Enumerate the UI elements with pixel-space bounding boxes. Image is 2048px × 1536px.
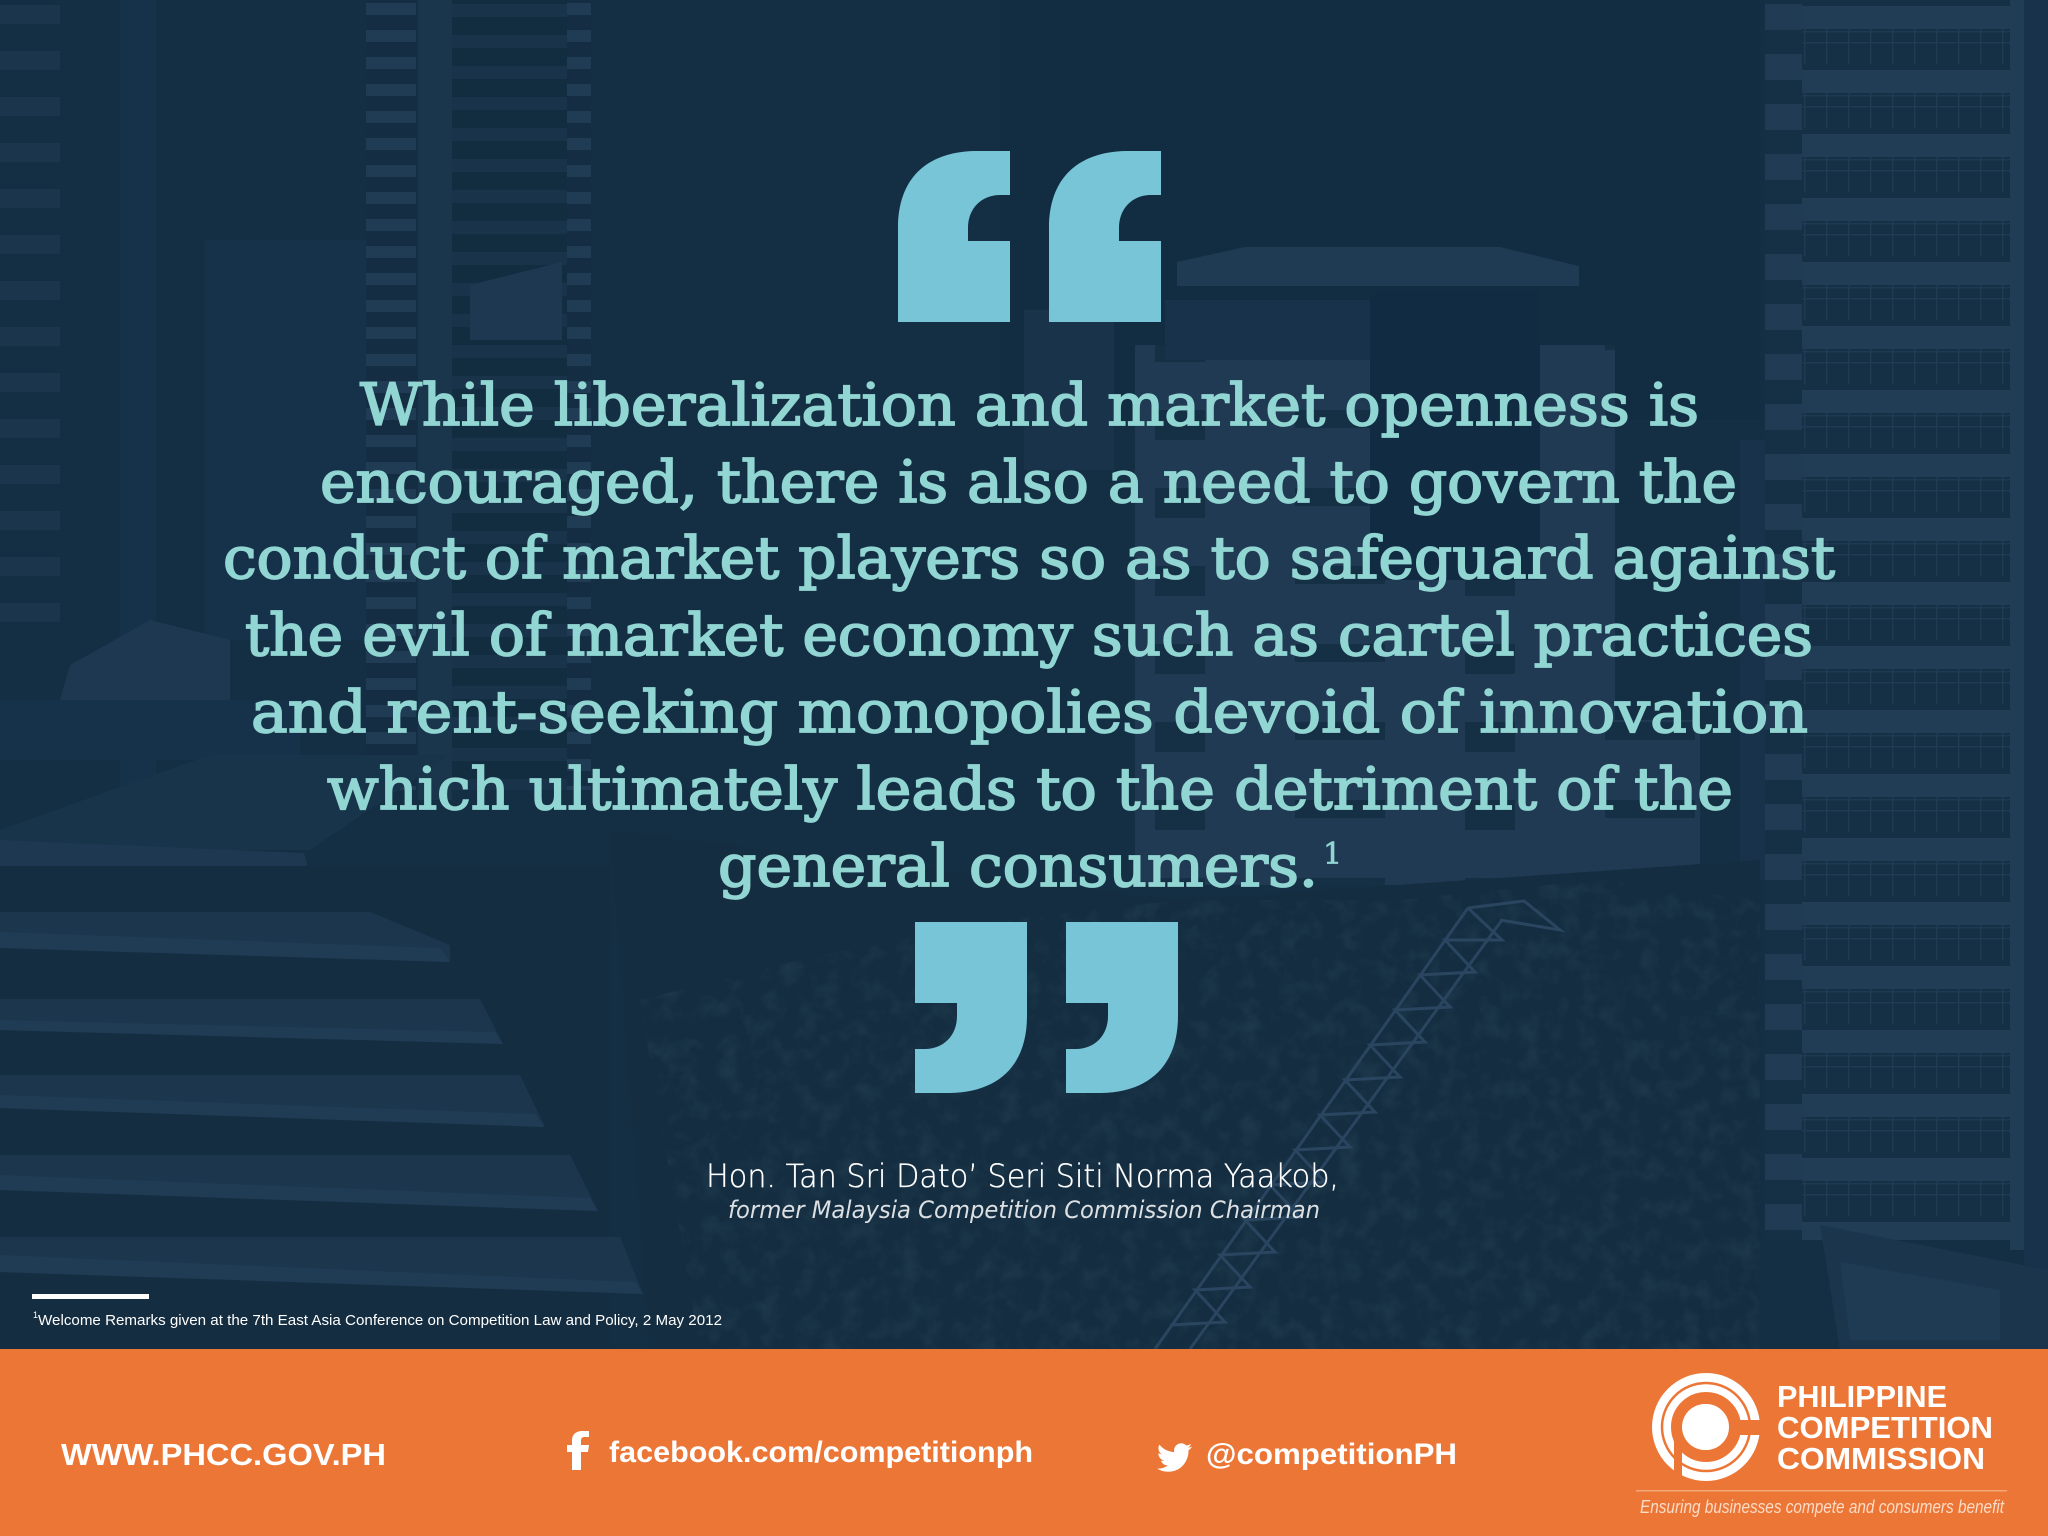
- attribution: [706, 1157, 1339, 1224]
- twitter handle: @competitionPH: [1206, 1438, 1457, 1471]
- footer bar: [0, 1349, 2048, 1536]
- right tower: [1765, 0, 2048, 1350]
- footnote: Welcome Remarks given at the 7th East Asia Conference on Competition Law and Policy, 2 May 2012: [38, 1312, 722, 1329]
- lower-left small buildings: [0, 620, 450, 850]
- opening quotation mark: [898, 151, 1161, 322]
- website: WWW.PHCC.GOV.PH: [61, 1437, 386, 1472]
- quote text: which ultimately leads to the detriment of the: [327, 755, 1733, 823]
- quote text: and rent-seeking monopolies devoid of innovation: [251, 678, 1808, 746]
- logo: Philippine Competition Commission: [1636, 1373, 2007, 1517]
- left tower: [366, 0, 591, 800]
- terraced building: [0, 840, 643, 1350]
- footnote: 1: [33, 1310, 38, 1320]
- logo: Philippine Competition Commission: COMMISSION: [1777, 1441, 1985, 1476]
- crane: [1155, 901, 1560, 1349]
- footnote: [32, 1294, 722, 1329]
- icon: facebook: [567, 1431, 589, 1470]
- logo: Philippine Competition Commission: COMPETITION: [1777, 1410, 1993, 1445]
- quote text: While liberalization and market openness is: [360, 371, 1699, 439]
- quote text: encouraged, there is also a need to govern the: [320, 448, 1737, 516]
- icon: twitter: [1157, 1443, 1192, 1472]
- quote text: conduct of market players so as to safeguard against: [223, 524, 1835, 592]
- attribution: Hon. Tan Sri Dato’ Seri Siti Norma Yaakob,: [706, 1157, 1339, 1195]
- facebook address: facebook.com/competitionph: [609, 1436, 1033, 1469]
- trees: [664, 860, 1760, 1349]
- quote text: general consumers.: [718, 832, 1318, 900]
- attribution: former Malaysia Competition Commission Chairman: [728, 1196, 1320, 1224]
- closing quotation mark: [915, 922, 1178, 1093]
- quote text: 1: [1323, 837, 1342, 872]
- quote text: [223, 371, 1835, 900]
- quote text: the evil of market economy such as cartel practices: [245, 601, 1813, 669]
- central building: [1024, 247, 1765, 890]
- logo: Philippine Competition Commission: PHILIPPINE: [1777, 1379, 1947, 1414]
